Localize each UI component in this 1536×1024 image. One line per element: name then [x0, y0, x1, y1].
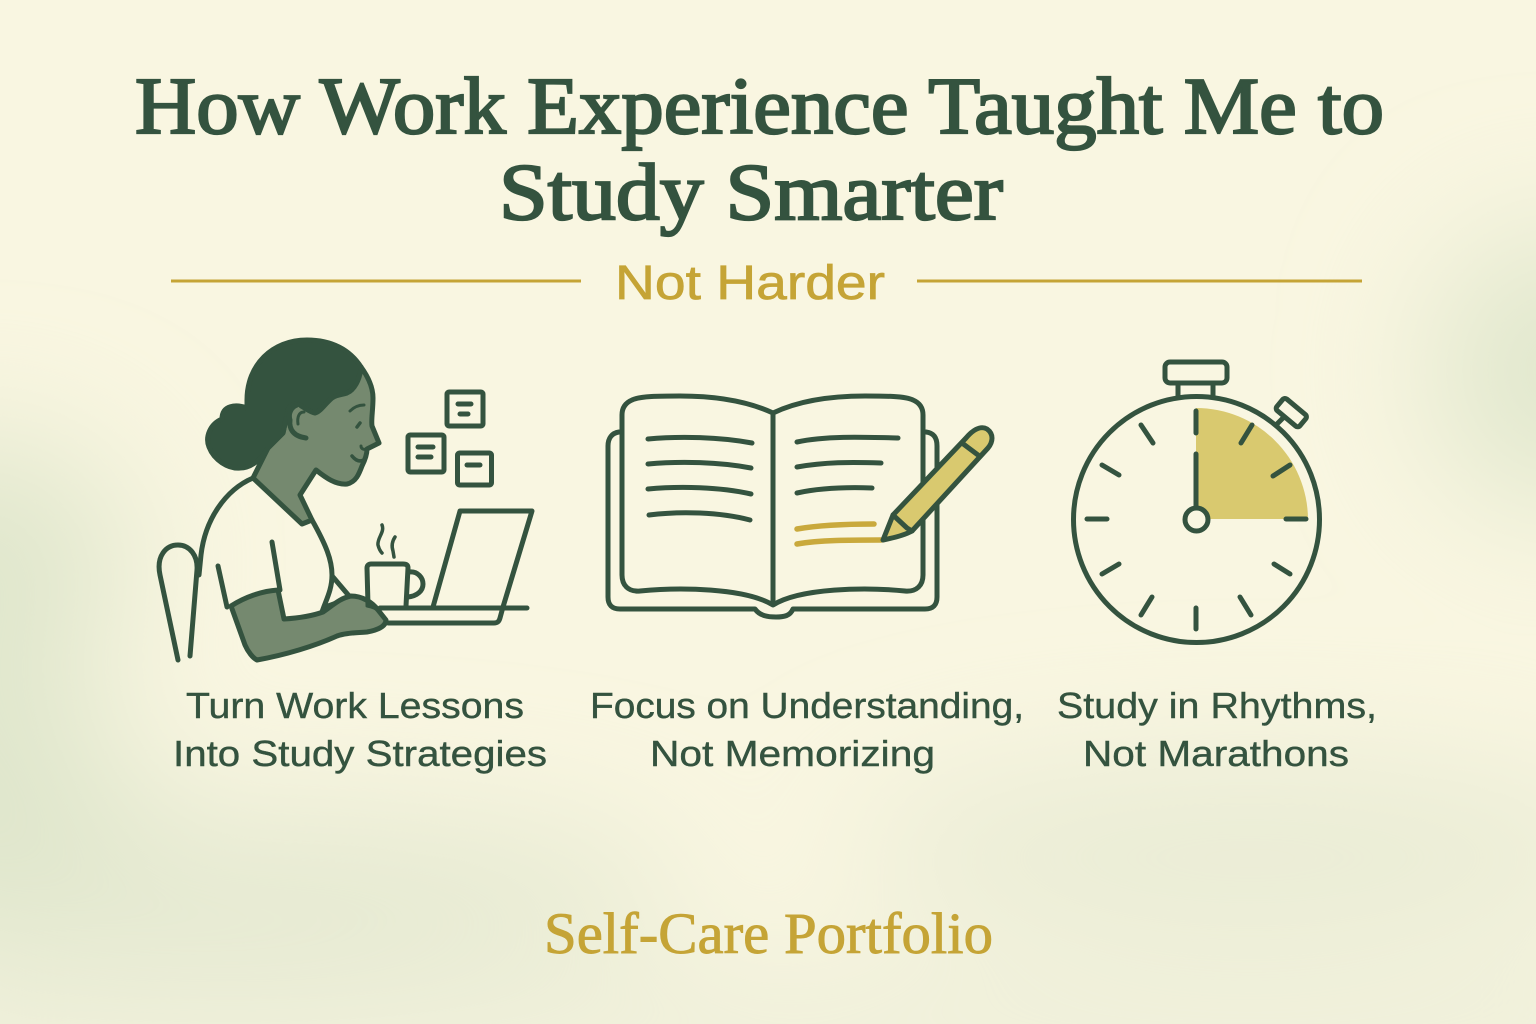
caption 1: Turn Work Lessons: [186, 685, 524, 726]
subtitle: Not Harder with rules: Not Harder: [615, 257, 885, 310]
caption 3: Study in Rhythms,: [1057, 685, 1377, 726]
pages: [622, 396, 923, 605]
coffee mug: [367, 564, 408, 606]
laptop: [433, 511, 532, 607]
left page text: [648, 437, 752, 520]
title: [135, 63, 1384, 237]
quarter pie: [1196, 408, 1308, 519]
pencil: [883, 428, 992, 540]
captions: [173, 685, 1377, 774]
ear: [289, 405, 310, 438]
icon: person working at laptop: [159, 340, 532, 660]
title: Study Smarter: [499, 149, 1003, 237]
caption 2: Not Memorizing: [650, 733, 935, 774]
caption 3: [1057, 685, 1377, 774]
arm: [231, 590, 386, 660]
hand: [1194, 454, 1198, 507]
steam: [378, 525, 383, 553]
dial: [1074, 396, 1320, 642]
eye, brow, mouth: [350, 405, 364, 411]
icon: stopwatch: [1074, 362, 1320, 642]
caption 3: Not Marathons: [1083, 733, 1349, 774]
face and neck: [253, 367, 379, 524]
footer: Self-Care Portfolio: Self-Care Portfolio: [544, 901, 993, 966]
back cover: [608, 432, 937, 617]
chair: [159, 545, 197, 660]
side button: [1275, 397, 1308, 428]
caption 1: Into Study Strategies: [173, 733, 547, 774]
hair: [208, 340, 361, 468]
caption 1: [173, 685, 547, 774]
highlighted lines: [797, 524, 881, 544]
crown: [1165, 362, 1227, 383]
icon: open book with pencil: [608, 396, 992, 617]
right page text: [797, 437, 898, 493]
sticky notes: [447, 392, 483, 426]
caption 2: Focus on Understanding,: [590, 685, 1024, 726]
ticks: [1087, 411, 1306, 629]
shirt: [199, 478, 253, 575]
caption 2: [590, 685, 1024, 774]
title: How Work Experience Taught Me to: [135, 63, 1384, 151]
